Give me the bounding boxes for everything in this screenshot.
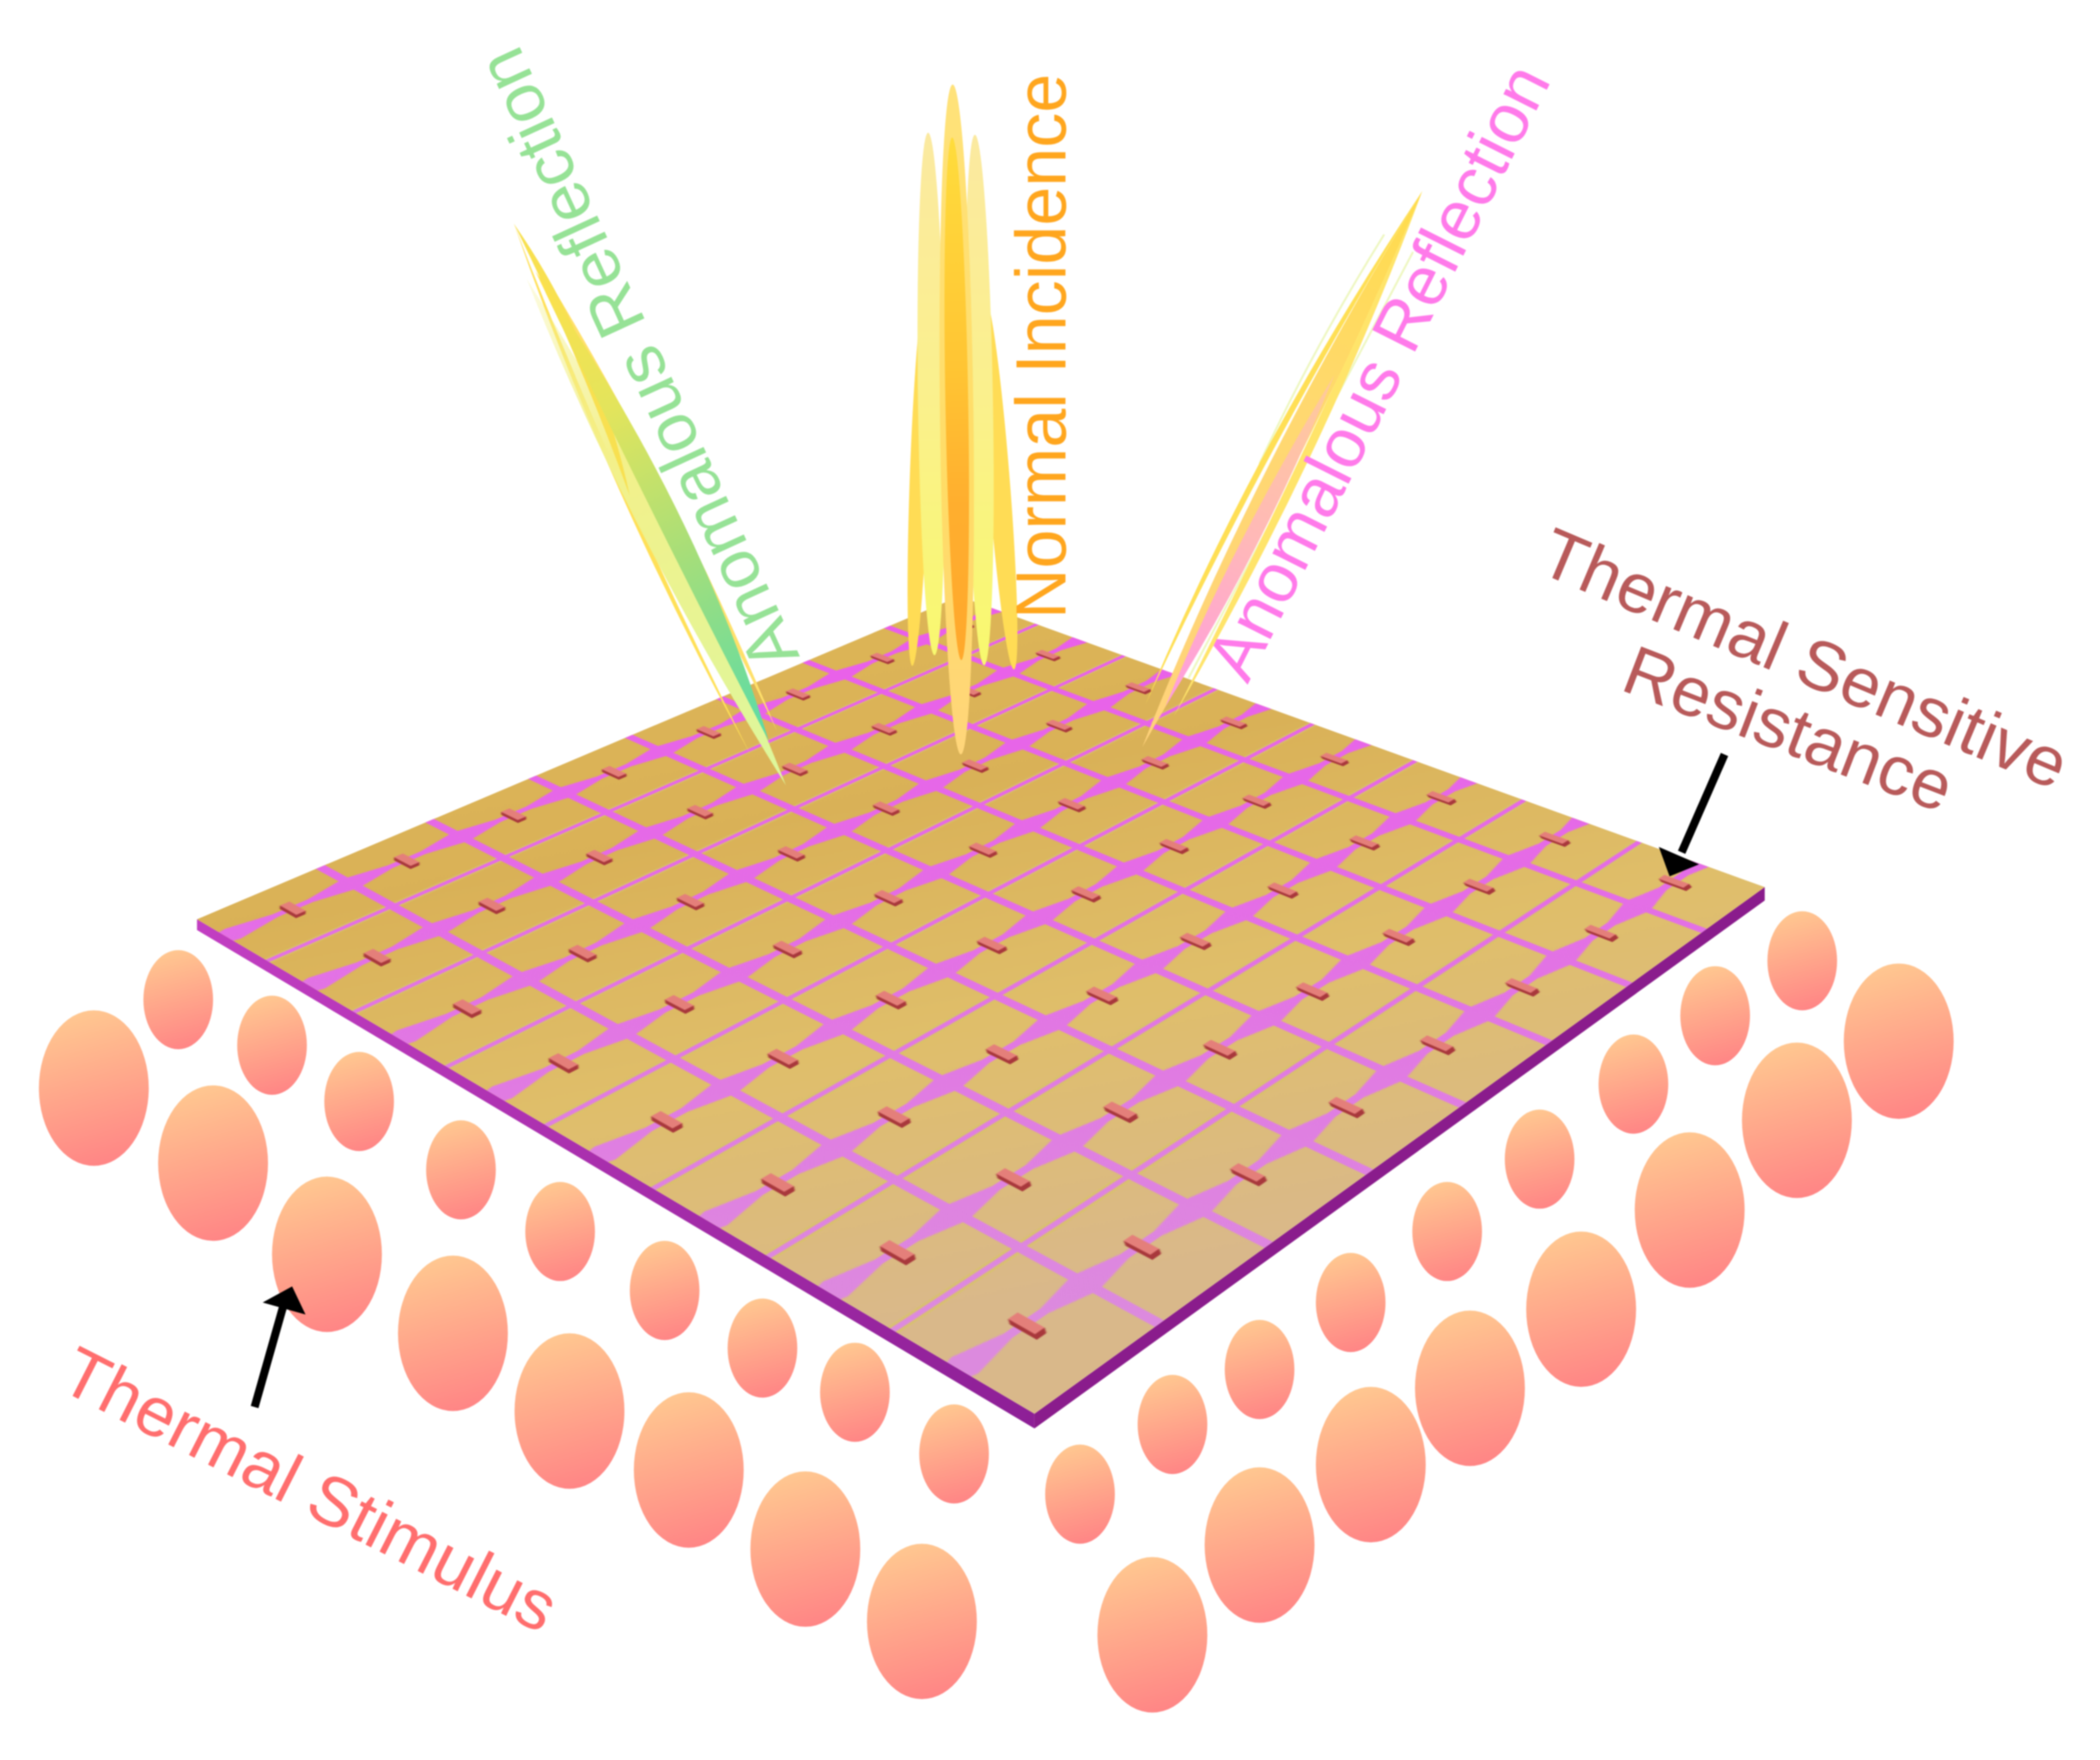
label: left anomalous reflection: Anomalous Reflection bbox=[461, 37, 813, 683]
thin row traces bbox=[237, 606, 1683, 1351]
label: thermal stimulus: Thermal Stimulus bbox=[50, 1332, 569, 1647]
label: right anomalous reflection: Anomalous Reflection bbox=[1192, 52, 1566, 691]
label: thermal sensitive resistance: Thermal Sensitive bbox=[1530, 514, 2079, 805]
label: thermal sensitive resistance: Resistance bbox=[1613, 631, 1963, 827]
cross traces bbox=[287, 616, 1713, 1328]
label: normal incidence: Normal Incidence bbox=[1001, 74, 1080, 619]
thermal sensitive resistors bbox=[277, 619, 1694, 1340]
thermal stimulus dots: left group bbox=[39, 950, 989, 1699]
plate side: left edge bbox=[197, 919, 1034, 1428]
metasurface plate top bbox=[197, 596, 1765, 1414]
diamond shaped trace patches bbox=[218, 607, 1709, 1377]
metasurface grid wrapper bbox=[218, 607, 1709, 1377]
thermal stimulus dots: right group bbox=[1045, 911, 1954, 1713]
arrow: to thermal sensitive resistor bbox=[1659, 754, 1725, 876]
beam: left anomalous reflection bbox=[514, 224, 786, 785]
beam: right anomalous reflection bbox=[1142, 191, 1422, 747]
resistor row spines bbox=[274, 618, 1687, 1337]
beam: normal incidence bbox=[903, 84, 1025, 755]
plate side: right edge bbox=[1034, 887, 1765, 1428]
arrow: to thermal stimulus dot bbox=[254, 1287, 306, 1407]
trace halo bbox=[265, 624, 1638, 1333]
